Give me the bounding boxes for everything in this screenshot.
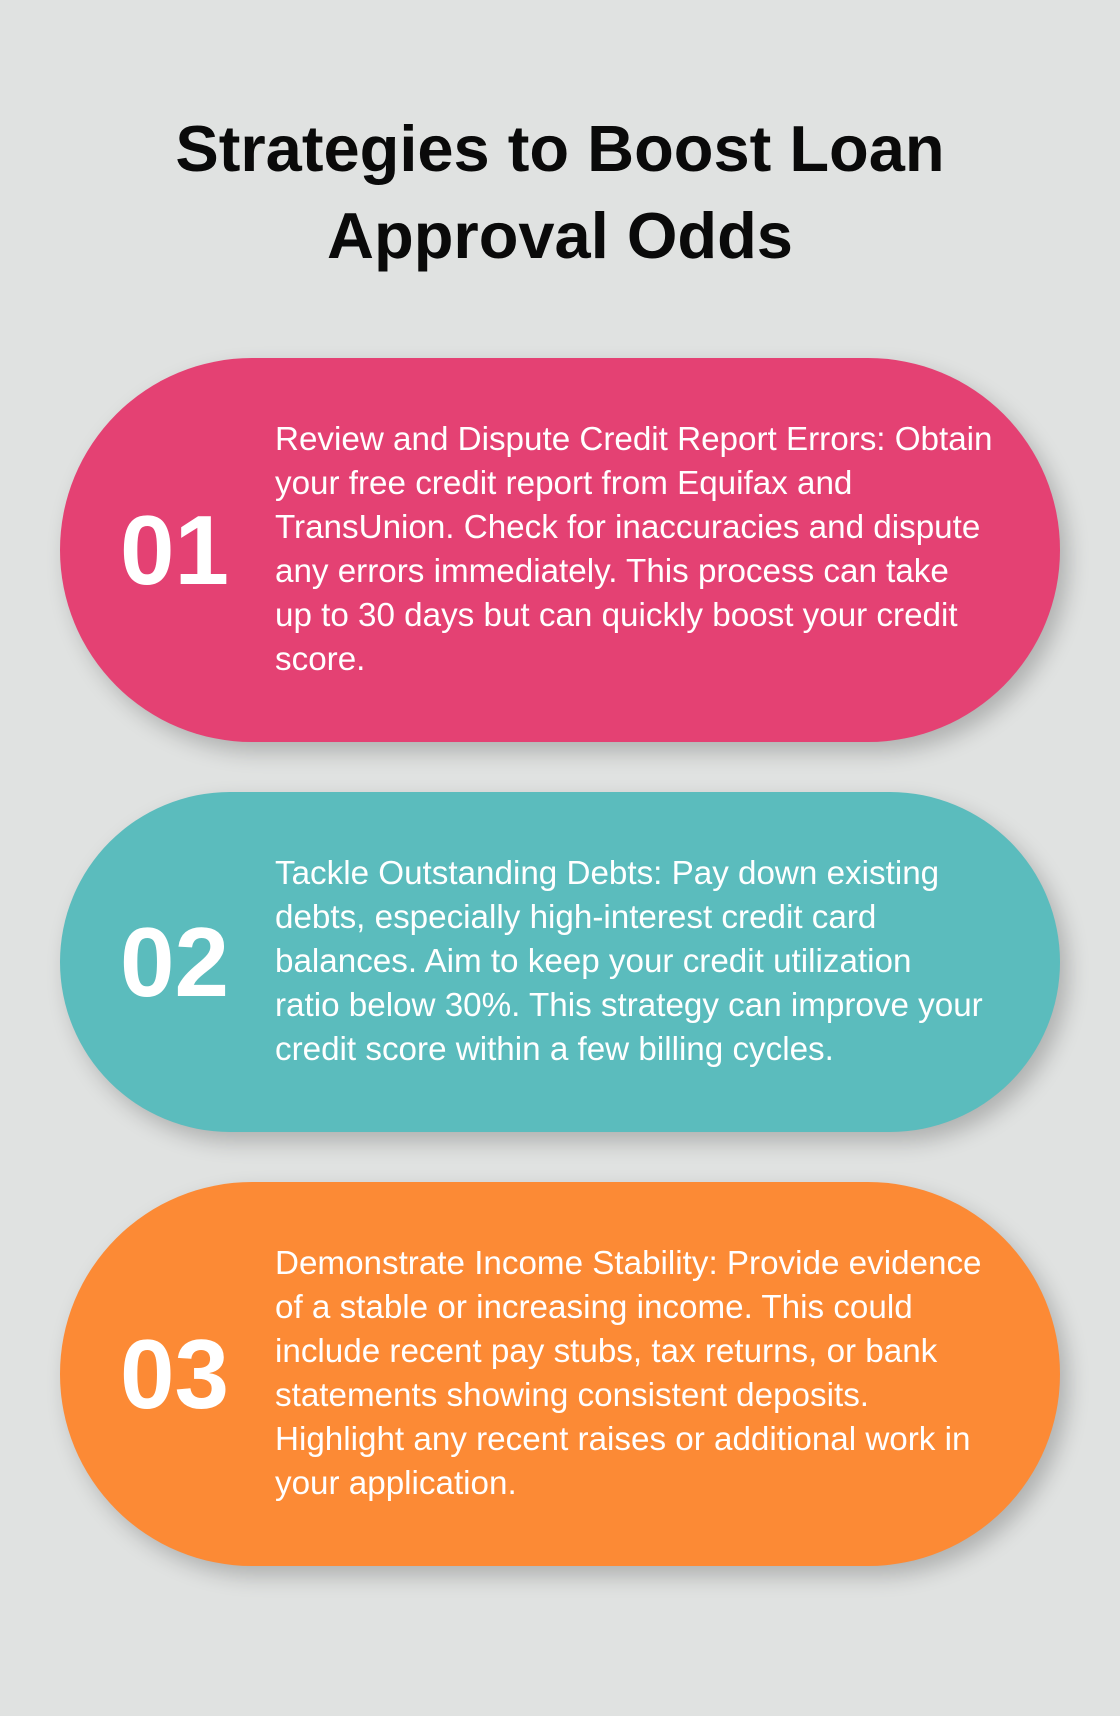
number 02: 02 (120, 907, 229, 1017)
text block 02: ratio below 30%. This strategy can improve your (275, 987, 983, 1024)
text block 01: TransUnion. Check for inaccuracies and dispute (275, 509, 980, 546)
panel: step 02 (60, 792, 1060, 1132)
text block 01 (275, 421, 993, 678)
title: Approval Odds (327, 199, 793, 272)
text block 03 (275, 1245, 982, 1502)
text block 01: score. (275, 641, 365, 678)
text block 03: of a stable or increasing income. This could (275, 1289, 913, 1326)
text block 02: balances. Aim to keep your credit utilization (275, 943, 911, 980)
text block 02: credit score within a few billing cycles. (275, 1031, 834, 1068)
title (175, 112, 945, 272)
text block 01: your free credit report from Equifax and (275, 465, 852, 502)
title: Strategies to Boost Loan (175, 112, 945, 185)
text block 02: Tackle Outstanding Debts: Pay down existing (275, 855, 939, 892)
text block 01: up to 30 days but can quickly boost your credit (275, 597, 958, 634)
panel: step 03 (60, 1182, 1060, 1566)
text block 02: debts, especially high-interest credit card (275, 899, 876, 936)
text block 03: Highlight any recent raises or additional work in (275, 1421, 970, 1458)
number 01: 01 (120, 495, 229, 605)
text block 01: any errors immediately. This process can take (275, 553, 949, 590)
number 03: 03 (120, 1319, 229, 1429)
panel: step 01 (60, 358, 1060, 742)
text block 01: Review and Dispute Credit Report Errors: Obtain (275, 421, 993, 458)
text block 03: Demonstrate Income Stability: Provide evidence (275, 1245, 982, 1282)
text block 03: statements showing consistent deposits. (275, 1377, 869, 1414)
text block 02 (275, 855, 983, 1068)
text block 03: include recent pay stubs, tax returns, or bank (275, 1333, 937, 1370)
text block 03: your application. (275, 1465, 517, 1502)
